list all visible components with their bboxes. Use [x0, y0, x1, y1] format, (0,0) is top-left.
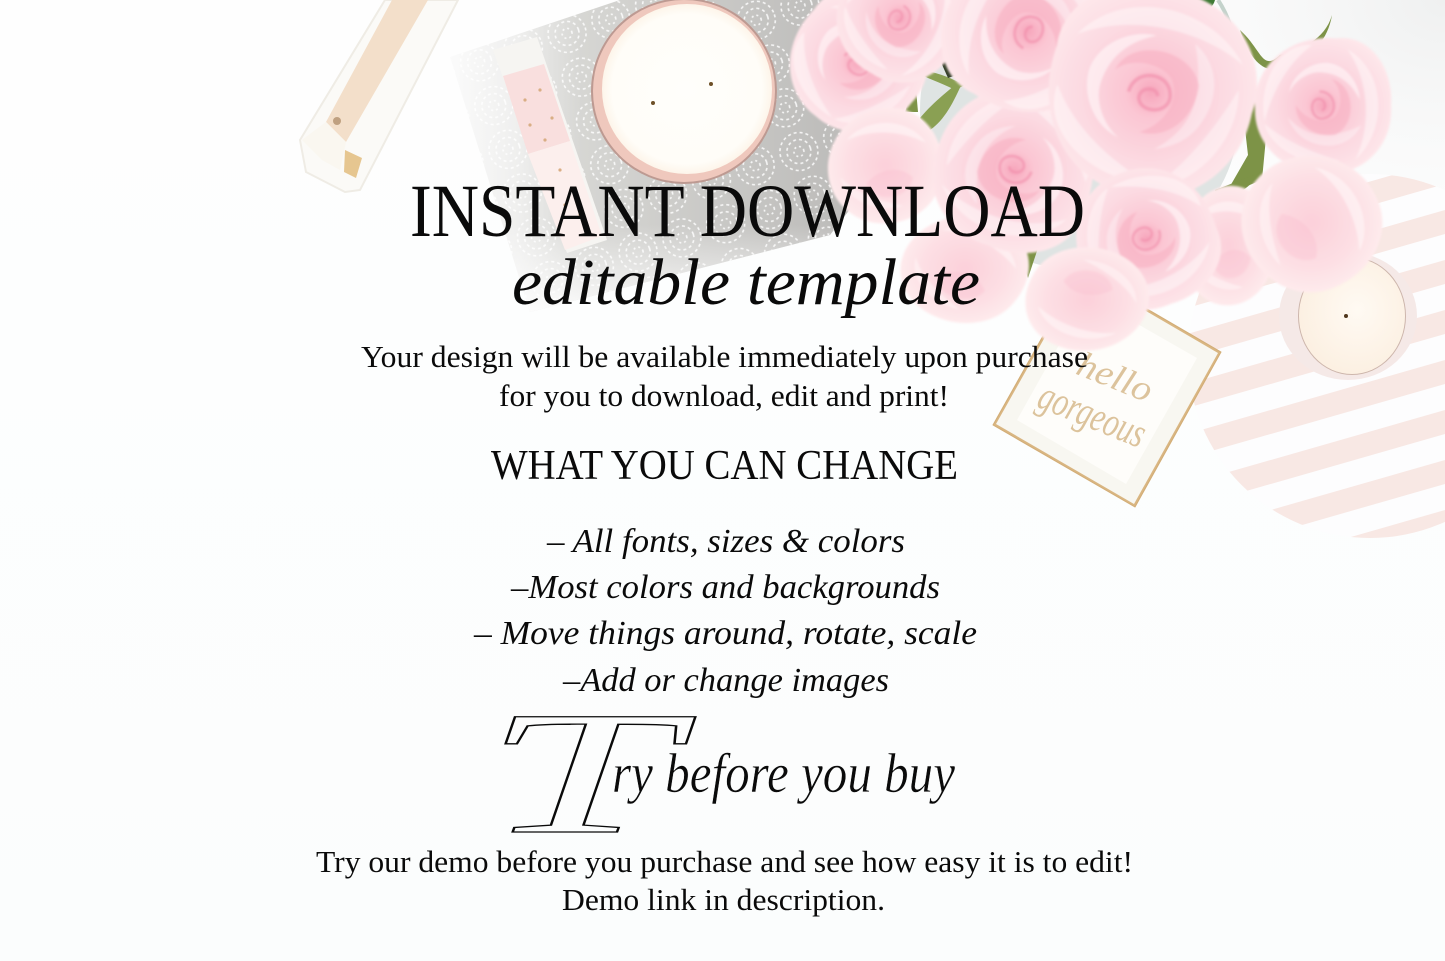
subtitle: editable template [512, 246, 980, 319]
rose: pale far right [1182, 186, 1274, 305]
script heading: try before you buy [483, 676, 955, 871]
rose: right upper [1255, 38, 1391, 173]
gold hello gorgeous dish [993, 270, 1221, 507]
rose: top left [815, 0, 984, 103]
intro text: Your design will be available immediately upon purchase [361, 339, 1088, 374]
rose: pale bottom [1009, 233, 1165, 366]
rose: right lower [1217, 129, 1406, 316]
intro text: for you to download, edit and print! [499, 378, 949, 413]
glass vase [920, 0, 1240, 270]
dish lettering: hello [1071, 344, 1159, 410]
rose: pale lower left [879, 195, 1051, 342]
title: INSTANT DOWNLOAD [410, 170, 1085, 253]
script heading: try before you buy: T [483, 676, 697, 871]
stapler [300, 0, 458, 192]
demo text: Demo link in description. [562, 882, 885, 917]
rose: far left [762, 0, 953, 158]
rose: top centre [916, 0, 1140, 143]
list of editable items: –Most colors and backgrounds [510, 569, 940, 606]
dish lettering: gorgeous [1032, 373, 1153, 457]
rose: bud lower left [828, 108, 942, 223]
infographic canvas [299, 0, 1445, 916]
list of editable items: – All fonts, sizes & colors [546, 523, 905, 560]
intro text [361, 339, 1088, 413]
list of editable items: –Add or change images [562, 662, 889, 699]
washi tape [493, 37, 607, 253]
rose: large centre [1024, 0, 1278, 220]
list of editable items [473, 523, 977, 699]
pink roses bouquet [762, 0, 1406, 366]
demo text: Try our demo before you purchase and see how easy it is to edit! [316, 844, 1133, 879]
rose: lower centre [1057, 148, 1236, 328]
script heading: try before you buy: ry before you buy [612, 743, 955, 805]
book with lace cover [450, 0, 865, 312]
demo text [316, 844, 1133, 917]
dish lettering [1032, 335, 1168, 457]
large candle [591, 0, 777, 184]
rose: centre left [912, 67, 1116, 272]
heading: what you can change: WHAT YOU CAN CHANGE [491, 443, 958, 489]
list of editable items: – Move things around, rotate, scale [473, 615, 977, 652]
leaves and stems [905, 0, 1332, 278]
photo: desk flat lay [299, 0, 1445, 538]
small candle [1279, 252, 1417, 380]
striped round placemat [1190, 176, 1445, 538]
